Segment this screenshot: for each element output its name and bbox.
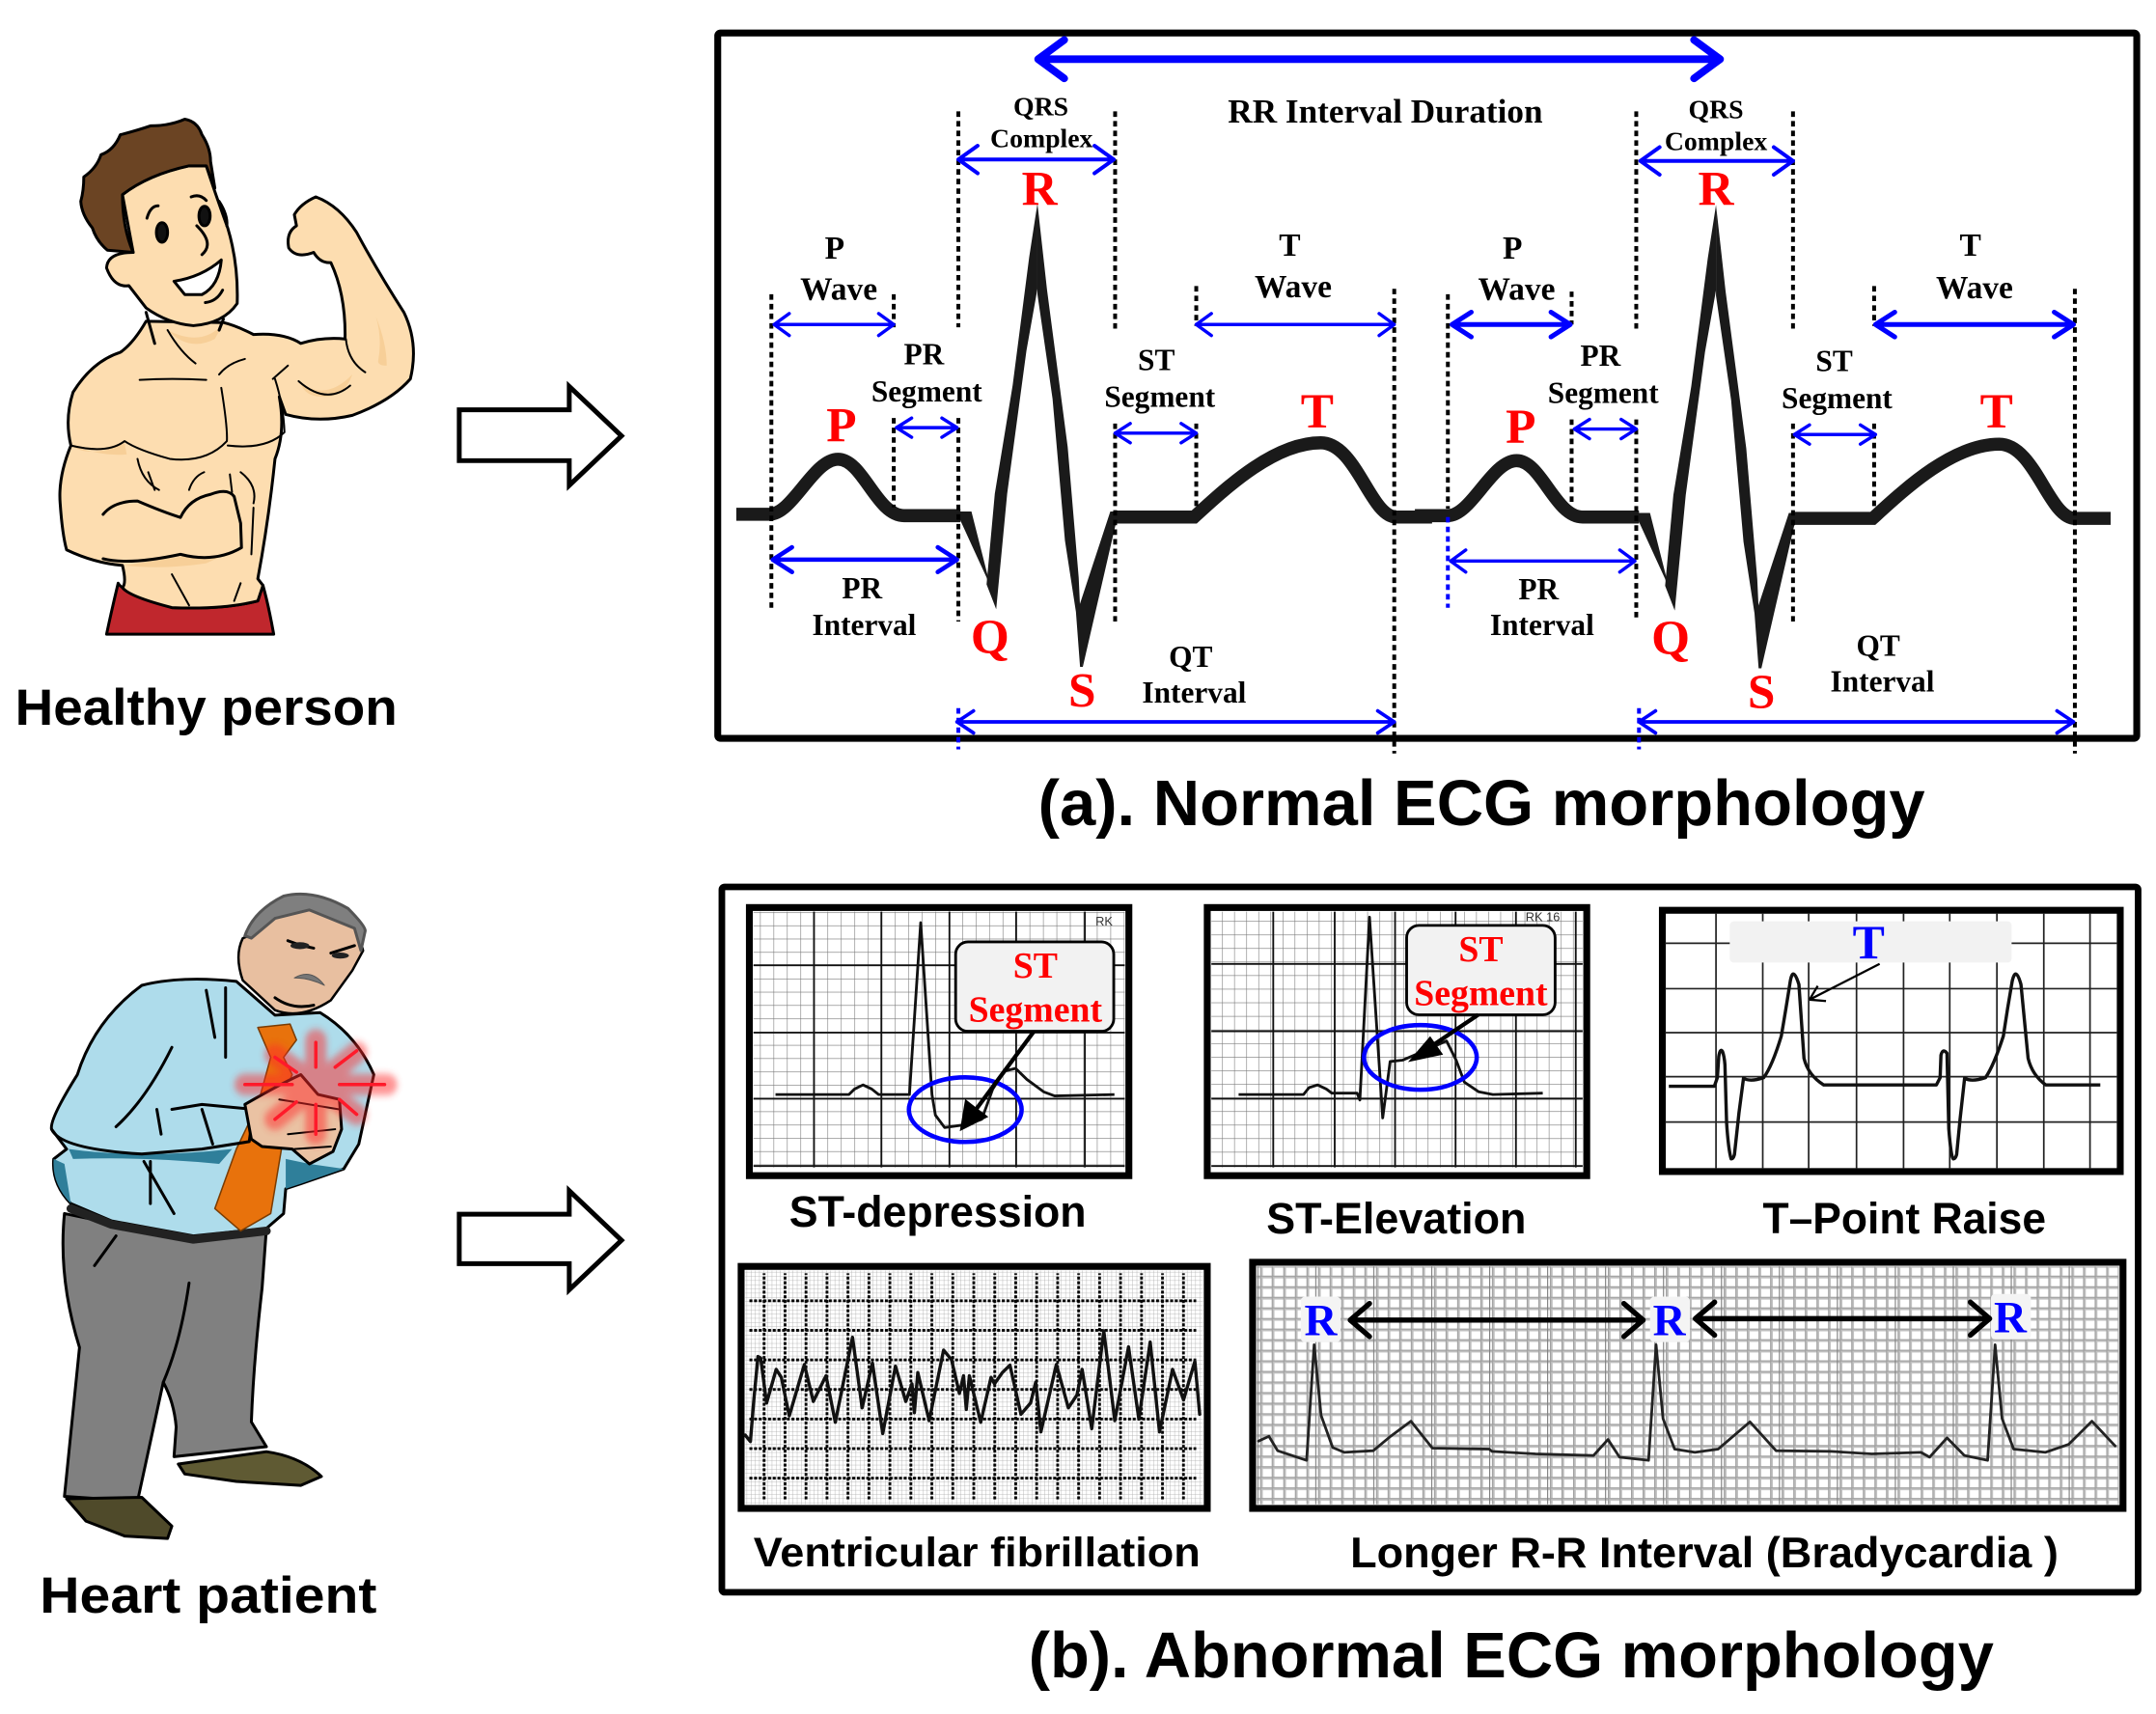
black labels: Wave: [800, 272, 877, 308]
black labels: PR: [1581, 339, 1621, 373]
blue circle: [1364, 1025, 1477, 1090]
R label 1: R: [1304, 1295, 1338, 1345]
title: abnormal ECG morphology: (b). Abnormal ECG morphology: [1029, 1619, 1994, 1692]
blue circle: [909, 1077, 1022, 1142]
red wave letters: [826, 161, 2013, 720]
eyes: [156, 223, 168, 242]
red wave letters: R: [1699, 161, 1735, 216]
black labels: Wave: [1936, 270, 2013, 306]
callout: ST segment: Segment: [1414, 974, 1548, 1014]
black labels: P: [1503, 231, 1522, 266]
R label 3: R: [1994, 1293, 2028, 1343]
red wave letters: Q: [971, 610, 1009, 665]
ear: [219, 202, 227, 226]
shirt: [51, 980, 373, 1236]
black labels: PR: [904, 338, 945, 372]
black labels: PR: [1518, 572, 1560, 606]
face features: [275, 941, 354, 1007]
black labels: Wave: [1255, 269, 1332, 305]
label: Healthy person: Healthy person: [15, 679, 398, 736]
black labels: T: [1279, 228, 1301, 263]
trouser lines: [95, 1236, 189, 1382]
black interval arrows: [1350, 1302, 1990, 1337]
callout: T: [1729, 916, 2011, 969]
chart: T-point raise: [1663, 910, 2120, 1172]
arrows: first beat spans: [958, 146, 1114, 174]
arrows: second beat spans: [1641, 147, 1793, 175]
callout: ST segment: ST: [1013, 946, 1058, 986]
panel frame: [718, 33, 2137, 738]
muscle shadows: [70, 317, 387, 567]
chart: ST-depression: RK: [1095, 914, 1113, 928]
black labels: PR: [842, 571, 883, 605]
belt: [70, 1208, 266, 1239]
chart: ST-depression: [749, 907, 1129, 1175]
red wave letters: R: [1022, 161, 1059, 216]
ECG trace beat 2: [1415, 205, 2111, 668]
pain burst glow: [245, 1040, 387, 1134]
black labels: Segment: [1104, 380, 1216, 414]
chart: ST-elevation: [1207, 907, 1587, 1175]
black labels: Interval: [1831, 665, 1935, 699]
caption: Ventricular fibrillation: Ventricular fibrillation: [754, 1530, 1201, 1576]
black labels: ST: [1138, 343, 1175, 376]
red wave letters: P: [1506, 400, 1535, 455]
caption: T-Point Raise: T–Point Raise: [1763, 1194, 2046, 1243]
face: [106, 166, 237, 325]
black labels: QT: [1169, 640, 1213, 674]
red wave letters: T: [1980, 384, 2013, 439]
callout arrow: [962, 1032, 1034, 1127]
callout arrow: [1810, 964, 1880, 1001]
sleeve and folds: [51, 988, 254, 1213]
black labels: Complex: [990, 124, 1093, 153]
head: [238, 908, 363, 1013]
chart: ST-elevation: RK 16: [1526, 910, 1560, 925]
black labels: [800, 93, 2013, 709]
black labels: QRS: [1689, 96, 1744, 125]
black labels: P: [825, 231, 844, 266]
red wave letters: S: [1068, 663, 1096, 718]
shoes: [67, 1497, 172, 1538]
finger lines: [279, 1099, 340, 1149]
blue dotted guides: [958, 517, 1639, 750]
black labels: Interval: [1142, 676, 1247, 709]
hair: [81, 120, 215, 253]
pain burst: [245, 1042, 384, 1134]
black labels: RR Interval Duration: [1228, 93, 1543, 130]
arrow: healthy to normal ECG: [459, 386, 622, 485]
smile: [174, 260, 221, 294]
black labels: Interval: [813, 608, 917, 642]
red wave letters: P: [826, 398, 857, 453]
panel: normal ECG: [718, 33, 2137, 754]
heart patient illustration: [51, 894, 387, 1538]
black labels: T: [1959, 228, 1981, 263]
black labels: Complex: [1665, 126, 1767, 156]
hair: [245, 894, 365, 951]
red wave letters: T: [1301, 384, 1334, 439]
shirt shadow: [53, 1149, 344, 1203]
dotted guides: [771, 111, 2075, 754]
title: normal ECG morphology: (a). Normal ECG morphology: [1038, 767, 1925, 840]
red wave letters: Q: [1651, 611, 1690, 666]
black labels: Segment: [1548, 375, 1659, 409]
hands: [245, 1075, 342, 1164]
tie: [215, 1024, 296, 1230]
callout: ST segment: Segment: [969, 990, 1102, 1031]
healthy person illustration: [60, 120, 413, 634]
black labels: Segment: [871, 374, 982, 408]
black labels: Segment: [1782, 381, 1893, 415]
red wave letters: S: [1748, 665, 1775, 720]
black labels: Wave: [1479, 272, 1555, 308]
black labels: Interval: [1490, 608, 1594, 642]
callout: ST segment: [955, 942, 1114, 1032]
arrow: RR interval: [1038, 40, 1720, 78]
caption: ST-Elevation: ST-Elevation: [1266, 1194, 1526, 1243]
chart: bradycardia: [1253, 1262, 2123, 1508]
callout: ST segment: [1407, 926, 1555, 1014]
shorts: [106, 583, 274, 634]
neck: [146, 313, 224, 344]
fist on abdomen: [103, 491, 241, 562]
black labels: QRS: [1013, 93, 1068, 123]
brows and nose: [147, 196, 207, 255]
callout arrow: [1414, 1014, 1479, 1059]
callout: T: T: [1853, 916, 1885, 969]
arrow: patient to abnormal ECG: [459, 1191, 622, 1289]
R label 2: R: [1653, 1295, 1687, 1345]
callout: ST segment: ST: [1458, 929, 1504, 970]
muscle lines: [70, 330, 365, 605]
caption: ST-depression: ST-depression: [789, 1187, 1087, 1236]
ECG trace beat 1: [736, 204, 1432, 667]
black labels: ST: [1815, 345, 1853, 378]
chart: ventricular fibrillation: [741, 1266, 1207, 1508]
trousers: [63, 1213, 266, 1502]
torso and flexed arm: [60, 197, 413, 608]
panel: abnormal ECG: [722, 887, 2138, 1592]
black labels: QT: [1857, 629, 1900, 663]
moustache: [294, 975, 324, 985]
caption: Longer R-R Interval: Longer R-R Interval (Bradycardia ): [1350, 1530, 2059, 1577]
panel frame: [722, 887, 2138, 1592]
label: Heart patient: Heart patient: [40, 1567, 376, 1624]
